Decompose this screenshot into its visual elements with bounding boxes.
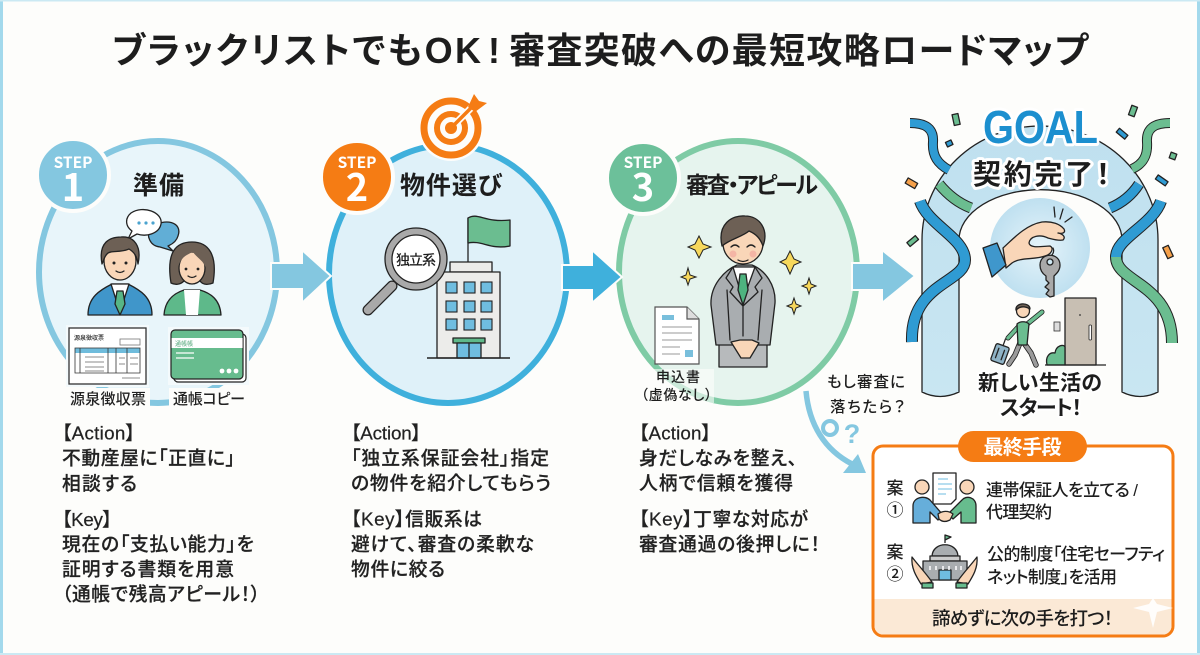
arch [922,126,1158,396]
ribbon: lower left [912,201,965,342]
text: new life start: 新しい生活の [978,372,1102,395]
arrow: step 2 to step 3 [562,250,622,303]
title: 審査突破への最短攻略ロードマップ [509,30,1090,71]
text: new life start: スタート！ [1000,397,1082,420]
text: option 1 [986,481,1138,522]
heading: 契約完了: 契約完了！ [973,159,1110,190]
badge: 最終手段: 最終手段 [984,436,1062,459]
icon: application form [655,307,699,364]
text: option 2: 公的制度「住宅セーフティ [987,545,1165,564]
badge: step 1: STEP [54,151,92,173]
ribbon: lower right [1116,201,1172,343]
label: 申込書（虚偽なし）: 申込書 [656,369,700,385]
text: if the review fails: 落ちたら？ [830,398,905,416]
title [112,30,1090,71]
icon: magnifier 独立系: 独立系 [396,252,436,268]
badge: step 3: 3 [632,157,654,212]
text: step 3 action and key: 【Action】 [639,422,711,444]
text: step 2 action and key: 「独立系保証会社」指定 [351,448,549,468]
title: ブラックリストでもOK [112,30,481,71]
panel: goal arch [905,101,1177,420]
icon: door [1045,298,1106,365]
text: step 2 action and key: 避けて、審査の柔軟な [351,534,534,554]
text: step 1 action and key: 証明する書類を用意 [62,558,234,580]
option 1 label: ① [886,501,904,520]
text: step 1 action and key: 不動産屋に「正直に」 [62,448,235,468]
panel: step 3 review and appeal [607,141,857,403]
footer band: 諦めずに次の手を打つ！ [932,608,1113,629]
panel: step 2 property selection [321,94,567,403]
icon: bowing man in suit [711,216,775,367]
badge: step 1: 1 [62,157,84,212]
icon: female agent [164,242,221,315]
text: step 3 action and key: 【Key】丁寧な対応が [639,508,809,530]
arrow: step 3 to goal [852,250,915,303]
ribbon: upper left [910,123,949,170]
icon: hand holding key [983,198,1090,298]
panel: last resort [873,431,1173,636]
arrow: curved to last resort: ? [844,419,860,449]
arrow: step 1 to step 2 [271,250,331,303]
title: ! [488,30,500,71]
option 2 label: ② [886,565,904,584]
text: step 2 action and key: の物件を紹介してもらう [351,472,551,494]
text: step 2 action and key [351,422,551,580]
icon: magnifier 独立系 [368,228,447,310]
heading: 準備: 準備 [133,172,184,200]
icon: withholding slip [66,325,149,387]
text: step 2 action and key: 【Action】 [351,422,421,444]
label: 申込書（虚偽なし）: （虚偽なし） [641,387,712,403]
badge: step 3 [607,142,679,214]
text: step 1 action and key: 相談する [62,473,137,494]
text: step 2 action and key: 【Key】信販系は [351,508,482,530]
text: new life start [978,372,1102,420]
icon: male client [88,237,152,315]
panel: step 1 preparation [37,139,277,408]
text: if the review fails: もし審査に [827,373,905,391]
text: step 3 action and key: 人柄で信頼を獲得 [639,472,793,494]
option 2 label: 案 [886,543,904,562]
badge: step 2: 2 [346,157,368,212]
arrow: curved to last resort [806,391,866,473]
icon: sparkles [681,236,816,314]
badge: step 2 [321,141,393,213]
text: step 2 action and key: 物件に絞る [351,558,445,580]
text: step 1 action and key [62,422,260,604]
confetti [905,105,1177,259]
badge: step 1 [37,139,109,212]
option 1 label [886,479,904,520]
icon: target [418,94,487,161]
icon: speech bubbles [127,210,179,251]
badge: 最終手段 [958,431,1087,462]
text: step 1 action and key: 【Key】 [62,509,112,530]
icon: person with suitcase [990,304,1042,365]
text: step 1 action and key: 現在の「支払い能力」を [62,534,254,554]
text: option 1: 代理契約 [986,503,1052,522]
label: 通帳コピー: 通帳コピー [173,391,245,408]
badge: step 2: STEP [338,151,376,173]
heading: 物件選び: 物件選び [400,172,503,200]
heading: 審査・アピール: 審査・アピール [686,172,818,198]
icon: handshake with document [913,473,976,523]
arch band blue [1110,184,1139,208]
arch band green [939,184,971,208]
text: step 3 action and key: 審査通過の後押しに！ [639,534,820,554]
text: step 3 action and key [639,422,820,554]
icon: passbook copy [168,327,249,385]
icon: passbook copy: 通帳帳 [175,340,193,348]
label: 申込書（虚偽なし） [640,369,714,403]
text: step 1 action and key: 【Action】 [62,422,135,444]
icon: building with flag [427,216,510,358]
icon: public building in hands [912,535,977,588]
heading: GOAL: GOAL [983,101,1098,153]
text: if the review fails [827,373,905,416]
text: option 2: ネット制度」を活用 [987,568,1117,587]
icon: withholding slip: 源泉徴収票 [74,334,104,342]
option 1 label: 案 [886,479,904,498]
text: option 1: 連帯保証人を立てる / [986,481,1138,500]
ribbon: upper right [1132,123,1170,169]
text: step 3 action and key: 身だしなみを整え、 [639,448,797,468]
text: option 2 [987,545,1165,587]
text: step 1 action and key: （通帳で残高アピール！） [62,584,260,604]
footer band [874,598,1173,634]
option 2 label [886,543,904,584]
label: 源泉徴収票: 源泉徴収票 [70,391,146,408]
badge: step 3: STEP [624,151,662,173]
